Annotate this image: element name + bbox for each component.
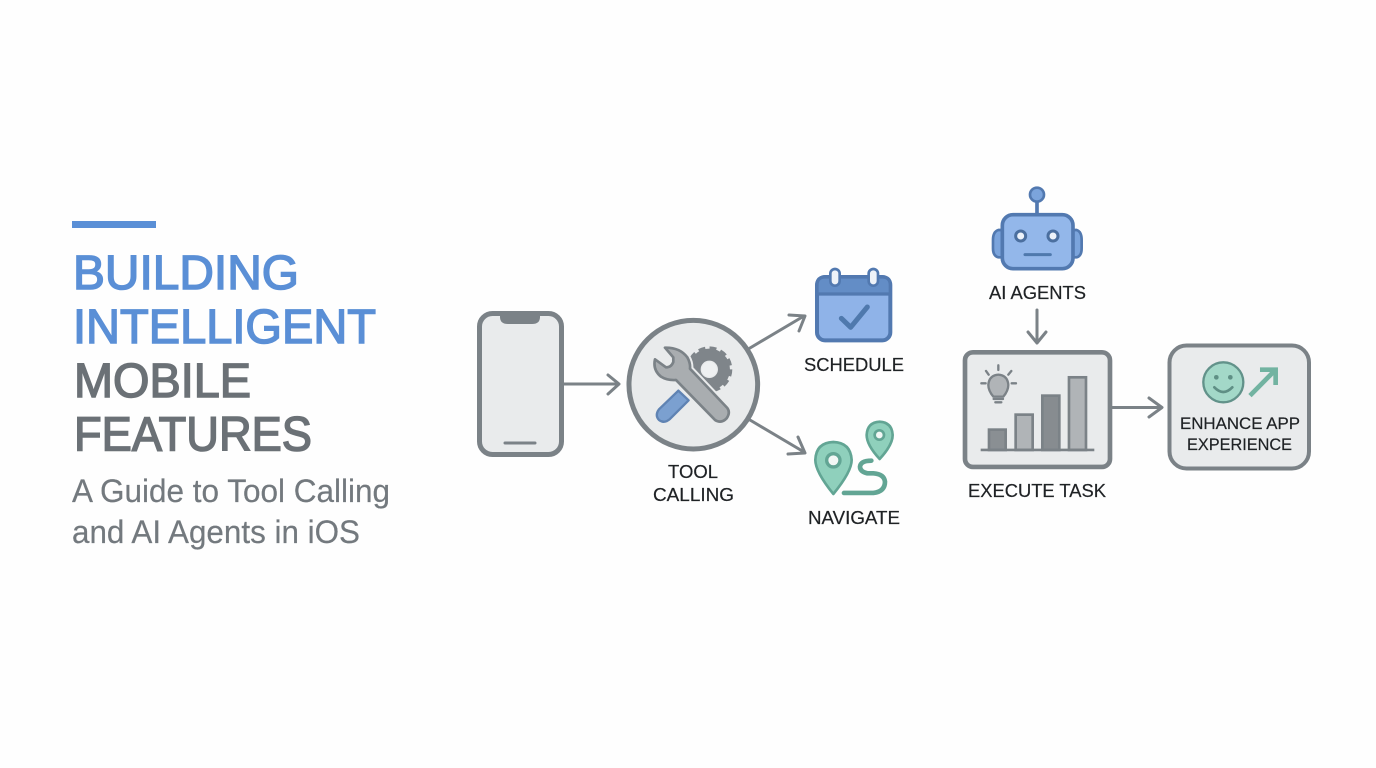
title: MOBILE [74, 354, 251, 408]
title: BUILDING [73, 246, 299, 300]
arrow: phone to tool calling [564, 375, 619, 394]
icon: wrench gap outline [654, 348, 729, 422]
title: INTELLIGENT [73, 300, 376, 354]
arrow: execute task to enhance [1112, 398, 1162, 417]
icon: light bulb [981, 365, 1016, 402]
label: execute task: EXECUTE TASK [968, 481, 1106, 501]
label: tool calling: CALLING [653, 485, 734, 505]
label: tool calling [653, 462, 734, 505]
bar chart [981, 377, 1094, 450]
title: FEATURES [74, 408, 312, 462]
label: tool calling: TOOL [668, 462, 718, 482]
arrow: ai agents to execute task [1028, 310, 1046, 343]
label: enhance app experience [1180, 414, 1300, 454]
subtitle: A Guide to Tool Calling [72, 473, 390, 509]
icon: tool calling circle [629, 320, 758, 449]
label: ai agents: AI AGENTS [989, 283, 1086, 303]
small pin [867, 422, 893, 459]
label: enhance app experience: ENHANCE APP [1180, 414, 1300, 433]
arrow: to navigate [750, 420, 805, 454]
title [73, 246, 376, 462]
icon: navigation pins [815, 422, 893, 494]
label: navigate: NAVIGATE [808, 508, 900, 528]
subtitle [72, 473, 390, 550]
arrow: to schedule [750, 315, 805, 348]
label: enhance app experience: EXPERIENCE [1187, 435, 1292, 454]
route line [844, 461, 885, 493]
icon: wrench [654, 348, 729, 422]
label: schedule: SCHEDULE [804, 355, 904, 375]
icon: smiley [1203, 362, 1243, 402]
icon: screwdriver handle [657, 391, 689, 422]
icon: calendar [817, 269, 890, 340]
panel: enhance app experience [1170, 346, 1309, 468]
icon: robot [993, 188, 1082, 269]
subtitle: and AI Agents in iOS [72, 514, 360, 550]
accent bar [72, 221, 156, 228]
panel: execute task chart [965, 352, 1110, 467]
large pin [815, 442, 852, 494]
icon: phone [480, 314, 562, 454]
icon: growth arrow [1250, 370, 1276, 396]
icon: gear [689, 349, 730, 390]
